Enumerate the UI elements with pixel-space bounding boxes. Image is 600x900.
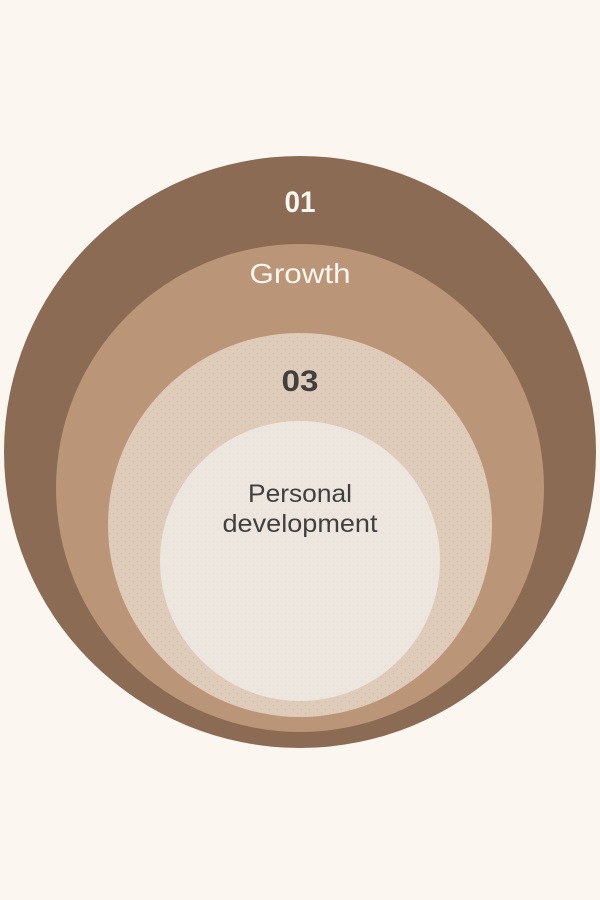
- label: Personal development: development: [222, 510, 378, 538]
- label: Personal development: Personal: [248, 480, 352, 508]
- label: Personal development: [222, 480, 378, 538]
- circle 4: inner circle: [160, 421, 440, 701]
- label: 03: 03: [282, 365, 318, 398]
- circle 1: outer ring: [4, 156, 596, 748]
- circle 2: growth ring: [56, 244, 544, 732]
- circle 3: middle ring: [108, 333, 492, 717]
- label: Growth: Growth: [250, 258, 350, 289]
- label: 01: 01: [284, 186, 316, 219]
